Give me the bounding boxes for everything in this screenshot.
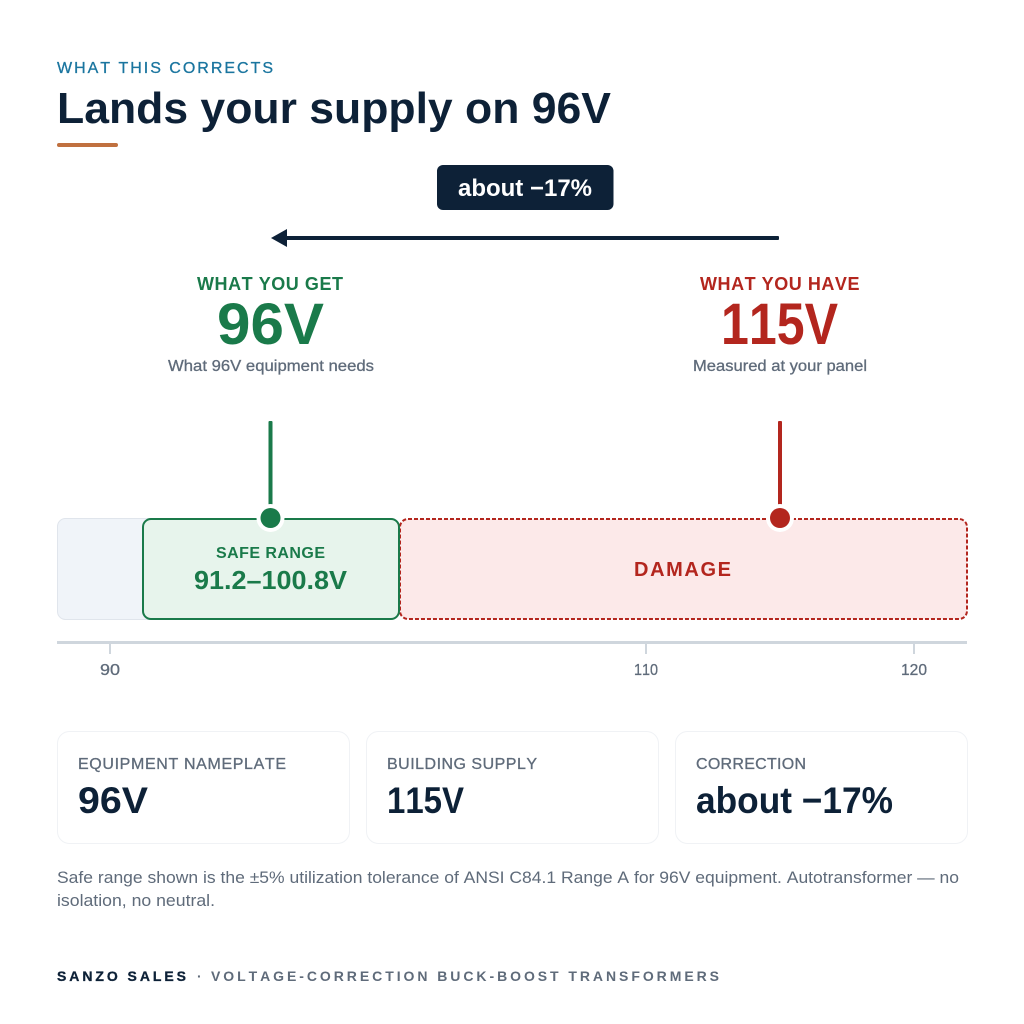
eyebrow: WHAT THIS CORRECTS: [57, 60, 273, 77]
damage zone: [400, 519, 967, 619]
voltage axis: 90: [100, 662, 120, 679]
safe range zone: 91.2–100.8V: [194, 565, 348, 595]
footer brand line: SANZO SALES: [57, 968, 186, 984]
badge: about -17%: [437, 165, 614, 210]
low zone: [58, 518, 158, 620]
card: building supply: BUILDING SUPPLY: [387, 756, 537, 773]
badge: about -17%: about −17%: [458, 175, 592, 202]
callout: what you have: WHAT YOU HAVE: [700, 274, 860, 294]
callout: what you get: [168, 274, 374, 375]
card: equipment nameplate: [58, 732, 350, 844]
card: equipment nameplate: EQUIPMENT NAMEPLATE: [78, 756, 286, 773]
voltage axis: [57, 641, 967, 679]
footnote: isolation, no neutral.: [57, 892, 215, 910]
safe range zone: SAFE RANGE: [216, 545, 325, 562]
card: building supply: 115V: [387, 780, 464, 821]
card: correction: [676, 732, 968, 844]
damage zone: DAMAGE: [634, 559, 731, 581]
voltage axis: 120: [901, 662, 927, 679]
voltage scale bar: [58, 421, 967, 620]
footnote: [57, 869, 959, 910]
correction arrow with badge: [271, 165, 779, 247]
card: building supply: [366, 732, 658, 844]
callout: what you get: 96V: [217, 292, 324, 357]
card: correction: about −17%: [696, 780, 893, 821]
footer brand line: ·: [197, 968, 202, 984]
card: correction: CORRECTION: [696, 756, 806, 773]
header: [57, 60, 612, 147]
callout: what you have: 115V: [721, 292, 838, 357]
footnote: Safe range shown is the ±5% utilization tolerance of ANSI C84.1 Range A for 96V equipment. Autotransformer — no: [57, 869, 959, 887]
card: equipment nameplate: 96V: [78, 780, 148, 821]
marker: 115V: [766, 421, 794, 532]
voltage axis: 110: [634, 662, 658, 679]
accent rule: [57, 143, 118, 147]
safe range zone: [143, 519, 399, 619]
marker: 96V: [256, 421, 284, 532]
callout: what you get: WHAT YOU GET: [197, 274, 343, 294]
footer brand line: VOLTAGE-CORRECTION BUCK-BOOST TRANSFORMERS: [211, 968, 719, 984]
callout: what you have: Measured at your panel: [693, 358, 867, 375]
title: Lands your supply on 96V: [57, 84, 612, 133]
callout: what you get: What 96V equipment needs: [168, 358, 374, 375]
callout: what you have: [693, 274, 867, 375]
arrow: [271, 229, 779, 247]
